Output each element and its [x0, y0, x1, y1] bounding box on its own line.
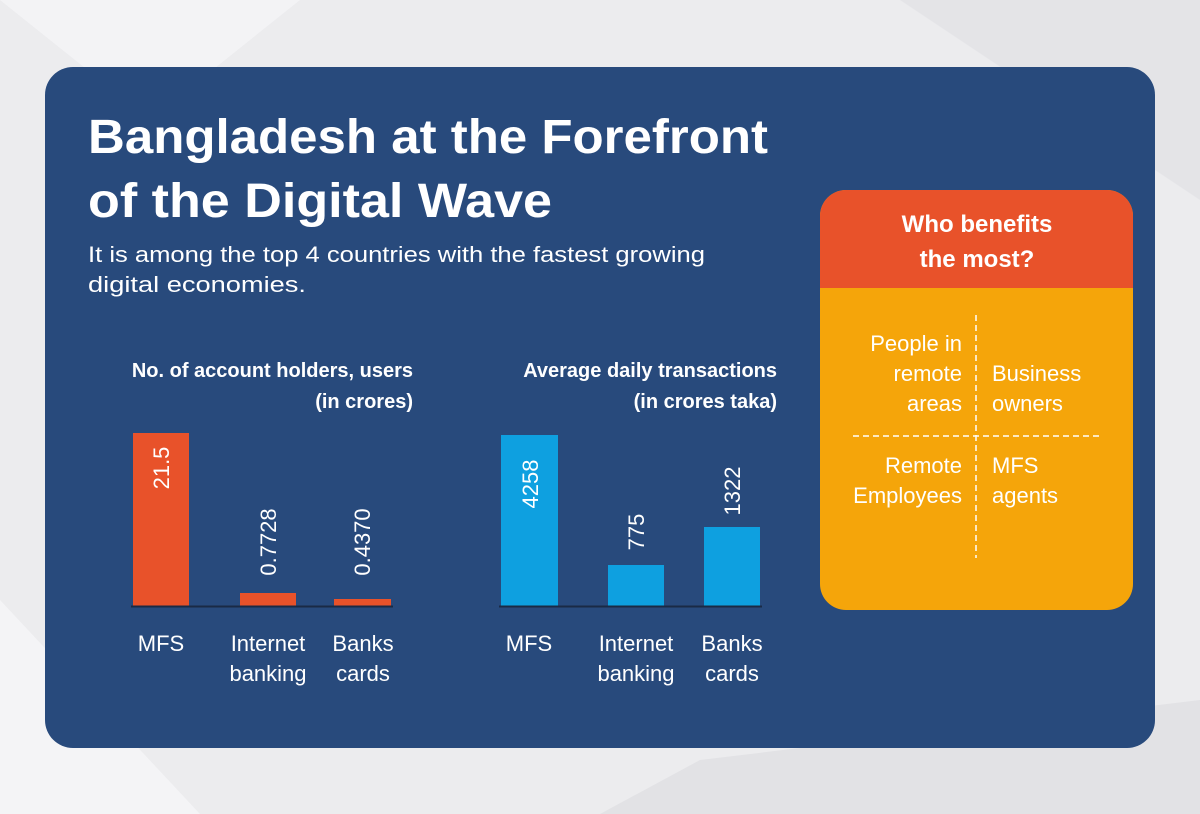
- chart title: [523, 360, 777, 413]
- heading: [902, 211, 1052, 273]
- panel: main blue card: [45, 67, 1155, 748]
- chart: daily transactions: 1322: [720, 467, 745, 515]
- chart title: No. of account holders, users: [132, 360, 413, 382]
- chart: daily transactions: 4258: [518, 460, 543, 508]
- chart: account holders: Internet: [231, 631, 305, 656]
- chart title: [132, 360, 413, 413]
- subtitle: It is among the top 4 countries with the fastest growing: [88, 242, 705, 267]
- panel: who benefits: [820, 190, 1133, 610]
- panel: who benefits: Employees: [853, 483, 962, 508]
- chart: daily transactions: banking: [597, 661, 675, 686]
- chart: account holders: 21.5: [149, 447, 174, 489]
- panel: who benefits: Business: [992, 361, 1081, 386]
- chart: account holders: 0.7728: [256, 508, 281, 576]
- panel: who benefits: People in: [870, 331, 962, 356]
- chart: daily transactions: Banks: [701, 631, 763, 656]
- title: [88, 111, 768, 228]
- chart: daily transactions: [499, 360, 777, 686]
- chart: account holders: banking: [229, 661, 307, 686]
- title: Bangladesh at the Forefront: [88, 111, 768, 164]
- panel: who benefits: agents: [992, 483, 1058, 508]
- panel: who benefits: owners: [992, 391, 1063, 416]
- chart: account holders: cards: [336, 661, 390, 686]
- heading: Who benefits: [902, 211, 1052, 238]
- title: of the Digital Wave: [88, 175, 552, 228]
- panel: who benefits: MFS: [992, 453, 1038, 478]
- chart: daily transactions: 775: [624, 514, 649, 550]
- chart title: (in crores): [315, 391, 413, 413]
- chart: daily transactions: Internet: [599, 631, 673, 656]
- chart: daily transactions: cards: [705, 661, 759, 686]
- panel: who benefits: areas: [907, 391, 962, 416]
- subtitle: digital economies.: [88, 272, 306, 297]
- chart: account holders: 0.4370: [350, 508, 375, 576]
- chart: account holders: Banks: [332, 631, 394, 656]
- panel: who benefits: Remote: [885, 453, 962, 478]
- heading: the most?: [920, 246, 1034, 273]
- chart title: Average daily transactions: [523, 360, 777, 382]
- panel: who benefits: remote: [894, 361, 962, 386]
- chart: account holders: [131, 360, 413, 686]
- chart: daily transactions: MFS: [506, 631, 552, 656]
- chart title: (in crores taka): [634, 391, 777, 413]
- chart: account holders: MFS: [138, 631, 184, 656]
- subtitle: [88, 242, 705, 297]
